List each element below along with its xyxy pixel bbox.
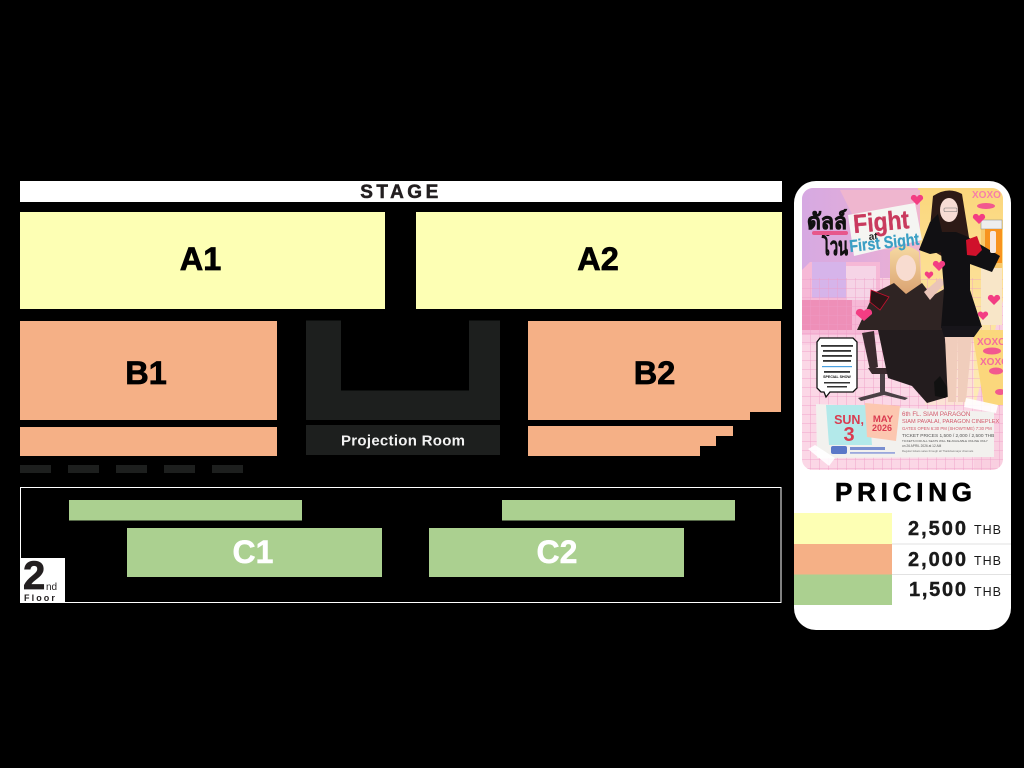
second floor area [20,488,781,603]
section A2 [416,212,782,309]
poster speech bubble [817,338,857,397]
section A1: A1 [180,241,221,277]
section A1 [20,212,385,309]
front bar right [502,500,735,520]
poster figure: standing woman [870,190,1000,402]
price row 1500 [794,574,1011,605]
section B2 [528,321,781,456]
price row 2500: THB [974,523,1002,537]
poster ticket details: on 26 APRIL 2026 at 12 AM [902,444,942,448]
chair [862,331,878,370]
section B1: B1 [125,355,167,391]
poster title block: โวน [821,231,848,261]
poster title block: First Sight [848,230,920,256]
section C2 [429,528,684,577]
blue date note: 3 [843,424,855,446]
price row 1500: THB [974,585,1002,599]
price row 2000: THB [974,554,1002,568]
projection room label: Projection Room [341,432,465,450]
poster title block: ดัลล์ [807,209,847,234]
section A2: A2 [577,241,619,277]
poster decoration: lips and xoxo: XOXO [972,190,1001,201]
poster ticket details: TICKETS FOR ALL SEATS WILL BE AVAILABLE ONLINE ONLY [902,439,988,443]
poster ticket details: TICKET PRICES 1,500 / 2,000 / 2,500 THB [902,433,994,439]
event poster [802,188,1009,470]
section B1 [20,321,277,456]
pink date note [865,403,900,441]
poster ticket details: SIAM PAVALAI, PARAGON CINEPLEX [902,419,999,425]
poster ticket details: GATES OPEN 6:30 PM (SHOWTIME) 7:30 PM [902,426,992,431]
pink date note: 2026 [872,423,892,433]
poster title block: Fight [852,204,911,239]
poster title block [807,203,922,261]
pricing card [794,181,1011,630]
blue date note [826,405,872,446]
second floor tag: nd [46,582,57,593]
second floor tag [21,554,65,603]
row of dashes [20,465,243,473]
price row 2000: 2,000 [908,549,966,571]
poster speech bubble: SPECIAL SHOW [823,375,851,379]
stage [20,181,782,203]
price row 2500 [794,513,1002,544]
section B2: B2 [634,355,675,391]
price row 2500: 2,500 [908,518,966,540]
pricing heading: PRICING [835,477,972,507]
projection room structure [306,320,500,420]
second floor tag: 2 [23,554,45,598]
second floor tag: Floor [24,593,57,603]
poster background [802,188,1003,470]
poster decoration: hearts [856,195,1000,321]
poster figure: seated woman [857,246,951,403]
front bar left [69,500,302,520]
poster title block: at [868,231,879,243]
stage: STAGE [360,182,442,203]
price row 1500: 1,500 [909,579,966,601]
poster decoration: lips and xoxo: XOXO [977,337,1006,348]
projection room label [306,425,500,455]
poster decoration: lips and xoxo: XOXO [980,357,1009,368]
venue text: 6th FL. SIAM PARAGON [902,411,970,418]
poster ticket details: Regular tickets sales through all Thaiticketmajor channels [902,449,974,453]
blue date note: SUN, [834,413,864,427]
section C1 [127,528,382,577]
section C1: C1 [233,534,273,570]
poster ticket details [808,398,999,466]
section C2: C2 [537,534,577,570]
pink date note: MAY [873,414,894,425]
poster decoration: lips and xoxo [972,191,1003,395]
price row 2000 [794,544,1011,574]
